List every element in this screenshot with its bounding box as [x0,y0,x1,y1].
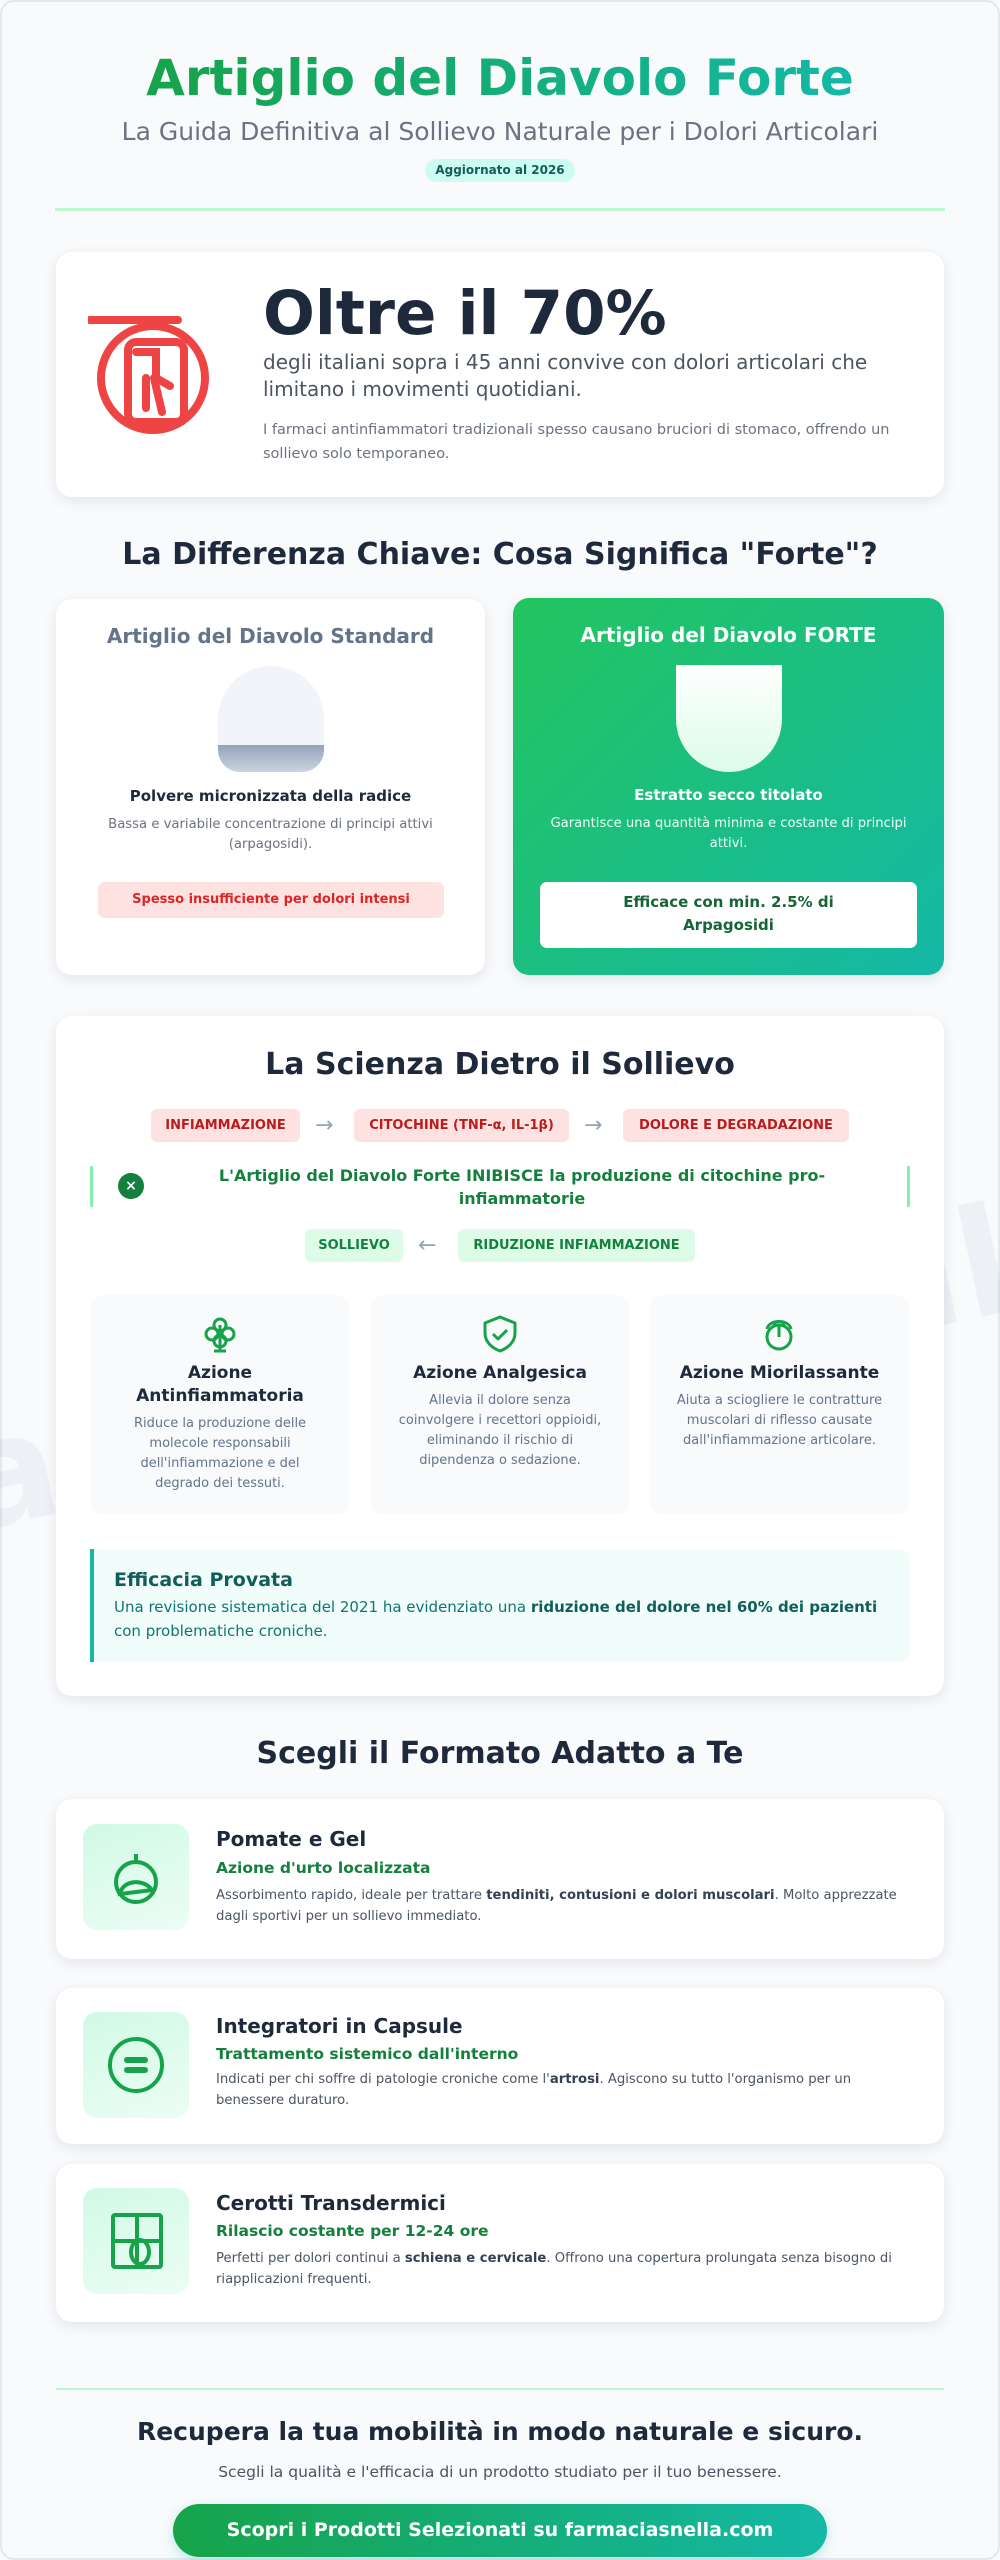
icon: block: × [125,1178,137,1194]
panel: standard [56,599,485,975]
flow: relief chain: ← [418,1233,436,1258]
callout: proven efficacy [90,1549,910,1662]
stat note: I farmaci antinfiammatori tradizionali spesso causano bruciori di stomaco, offrendo un sollievo solo temporaneo. [263,422,889,462]
subtitle: La Guida Definitiva al Sollievo Naturale per i Dolori Articolari [122,117,878,146]
panel: capsules: Trattamento sistemico dall'interno [216,2045,518,2063]
forte highlight: Efficace con min. 2.5% di [623,893,834,911]
forte title: Artiglio del Diavolo FORTE [581,623,876,647]
flow: relief chain: SOLLIEVO [318,1238,390,1253]
panel: capsules: Indicati per chi soffre di patologie croniche come l'artrosi. Agiscono su tutto l'organismo per un benessere duraturo. [216,2072,851,2108]
flow: inflammation chain: CITOCHINE (TNF-α, IL-1β) [369,1118,554,1133]
standard warning [98,882,444,918]
heading: call to action: Recupera la tua mobilità in modo naturale e sicuro. [137,2417,863,2446]
card: analgesic: Azione Analgesica [413,1363,587,1383]
callout: proven efficacy: Una revisione sistematica del 2021 ha evidenziato una riduzione del dolore nel 60% dei pazienti con problematiche croniche. [114,1598,877,1640]
badge: updated: Aggiornato al 2026 [435,163,565,177]
panel: gels: Azione d'urto localizzata [216,1859,431,1877]
text: cta subtitle: Scegli la qualità e l'efficacia di un prodotto studiato per il tuo benessere. [218,2463,782,2481]
flow: inflammation chain: DOLORE E DEGRADAZIONE [639,1118,833,1133]
callout: proven efficacy: Efficacia Provata [114,1569,293,1591]
icon: gel [83,1824,189,1930]
panel: capsules: Integratori in Capsule [216,2014,463,2038]
button: cta [173,2504,827,2557]
panel: gels: Assorbimento rapido, ideale per trattare tendiniti, contusioni e dolori muscolari. Molto apprezzate dagli sportivi per un sollievo immediato. [216,1888,897,1924]
callout: inhibition: L'Artiglio del Diavolo Forte INIBISCE la produzione di citochine pro-infiammatorie [219,1166,825,1208]
icon: shield [484,1316,516,1352]
icon: forte capsule [676,665,782,772]
forte highlight: Arpagosidi [683,916,774,934]
panel: patches: Rilascio costante per 12-24 ore [216,2222,488,2240]
card: analgesic: Allevia il dolore senza coinvolgere i recettori oppioidi, eliminando il rischio di dipendenza o sedazione. [399,1393,601,1468]
panel: gels: Pomate e Gel [216,1827,366,1851]
panel: statistic [56,252,944,497]
flow: inflammation chain [151,1109,849,1142]
card: analgesic [371,1295,629,1514]
badge: updated [425,159,575,182]
forte subtitle: Estratto secco titolato [634,786,823,804]
stat description: degli italiani sopra i 45 anni convive con dolori articolari che limitano i movimenti quotidiani. [263,350,867,401]
icon: muscle [766,1320,792,1350]
card: muscle relaxant: Aiuta a sciogliere le contratture muscolari di riflesso causate dall'infiammazione articolare. [677,1393,882,1448]
forte description: Garantisce una quantità minima e costante di principi attivi. [550,816,907,851]
panel: gels [56,1799,944,1959]
flow: relief chain [305,1229,695,1262]
panel: patches [56,2164,944,2322]
panel: patches: Cerotti Transdermici [216,2191,446,2215]
standard title: Artiglio del Diavolo Standard [107,624,434,648]
card: anti-inflammatory: Azione Antinfiammatoria [136,1363,304,1406]
icon: capsule [83,2012,189,2118]
icon: patch [83,2188,189,2294]
panel: patches: Perfetti per dolori continui a schiena e cervicale. Offrono una copertura prolungata senza bisogno di riapplicazioni frequenti. [216,2251,892,2286]
flow: relief chain: RIDUZIONE INFIAMMAZIONE [473,1238,680,1253]
standard subtitle: Polvere micronizzata della radice [130,787,411,805]
heading: science: La Scienza Dietro il Sollievo [265,1047,735,1082]
card: muscle relaxant [650,1295,909,1514]
forte highlight [540,882,917,948]
panel: capsules [56,1988,944,2144]
button: cta: Scopri i Prodotti Selezionati su farmaciasnella.com [227,2519,773,2541]
panel: forte [513,598,944,975]
icon: block [118,1173,144,1199]
standard description: Bassa e variabile concentrazione di principi attivi (arpagosidi). [108,817,433,852]
icon: standard capsule [218,666,324,772]
standard warning: Spesso insufficiente per dolori intensi [132,892,410,907]
card: muscle relaxant: Azione Miorilassante [680,1363,879,1383]
card: anti-inflammatory [91,1295,349,1514]
heading: differenza chiave: La Differenza Chiave: Cosa Significa "Forte"? [122,537,878,572]
title: Artiglio del Diavolo Forte [146,49,854,107]
icon: joint pain [88,316,209,434]
panel: science [56,1016,944,1696]
flow: inflammation chain: → [584,1113,602,1138]
heading: formats: Scegli il Formato Adatto a Te [256,1736,744,1771]
card: anti-inflammatory: Riduce la produzione delle molecole responsabili dell'infiammazione e del degrado dei tessuti. [134,1416,306,1491]
flow: inflammation chain: → [315,1113,333,1138]
icon: plant [204,1318,236,1352]
stat number: Oltre il 70% [263,278,667,349]
flow: inflammation chain: INFIAMMAZIONE [165,1118,286,1133]
